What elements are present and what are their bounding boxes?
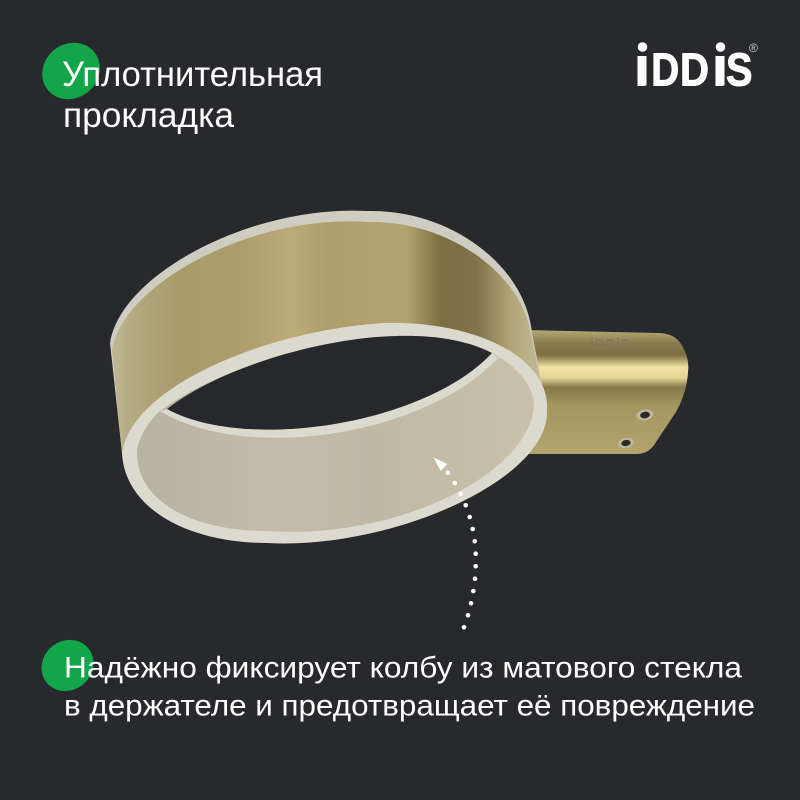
logo: iddis: D [651,44,679,96]
logo: iddis: D [680,44,709,96]
front seal rim [122,323,547,543]
heading [62,55,323,135]
description text: в держателе и предотвращает её повреждение [64,690,755,722]
inner wall of gasket [137,336,534,532]
description text: Надёжно фиксирует колбу из матового стекла [64,652,742,684]
arrow: dotted pointer to gasket [433,457,478,630]
logo: iddis: ® [749,41,758,55]
heading: Уплотнительная [62,55,323,94]
brushed brass band [112,221,547,453]
far rim seen through opening [160,353,498,438]
logo: iddis: i [635,44,648,96]
product: gasket ring [110,211,547,543]
heading: прокладка [63,96,235,135]
product: wall bracket [525,330,688,454]
icon: green accent blob behind description [31,629,104,702]
description text [64,652,755,722]
logo: iddis [634,40,758,96]
screw hole lower [617,437,635,449]
icon: green accent blob behind heading [31,31,111,111]
dark opening [167,336,492,430]
screw hole upper [636,408,654,422]
logo: iddis: i [713,44,726,96]
logo: iddis: S [726,44,752,96]
top seal rim [110,211,547,453]
engraved logo: iDDiS [590,336,630,353]
